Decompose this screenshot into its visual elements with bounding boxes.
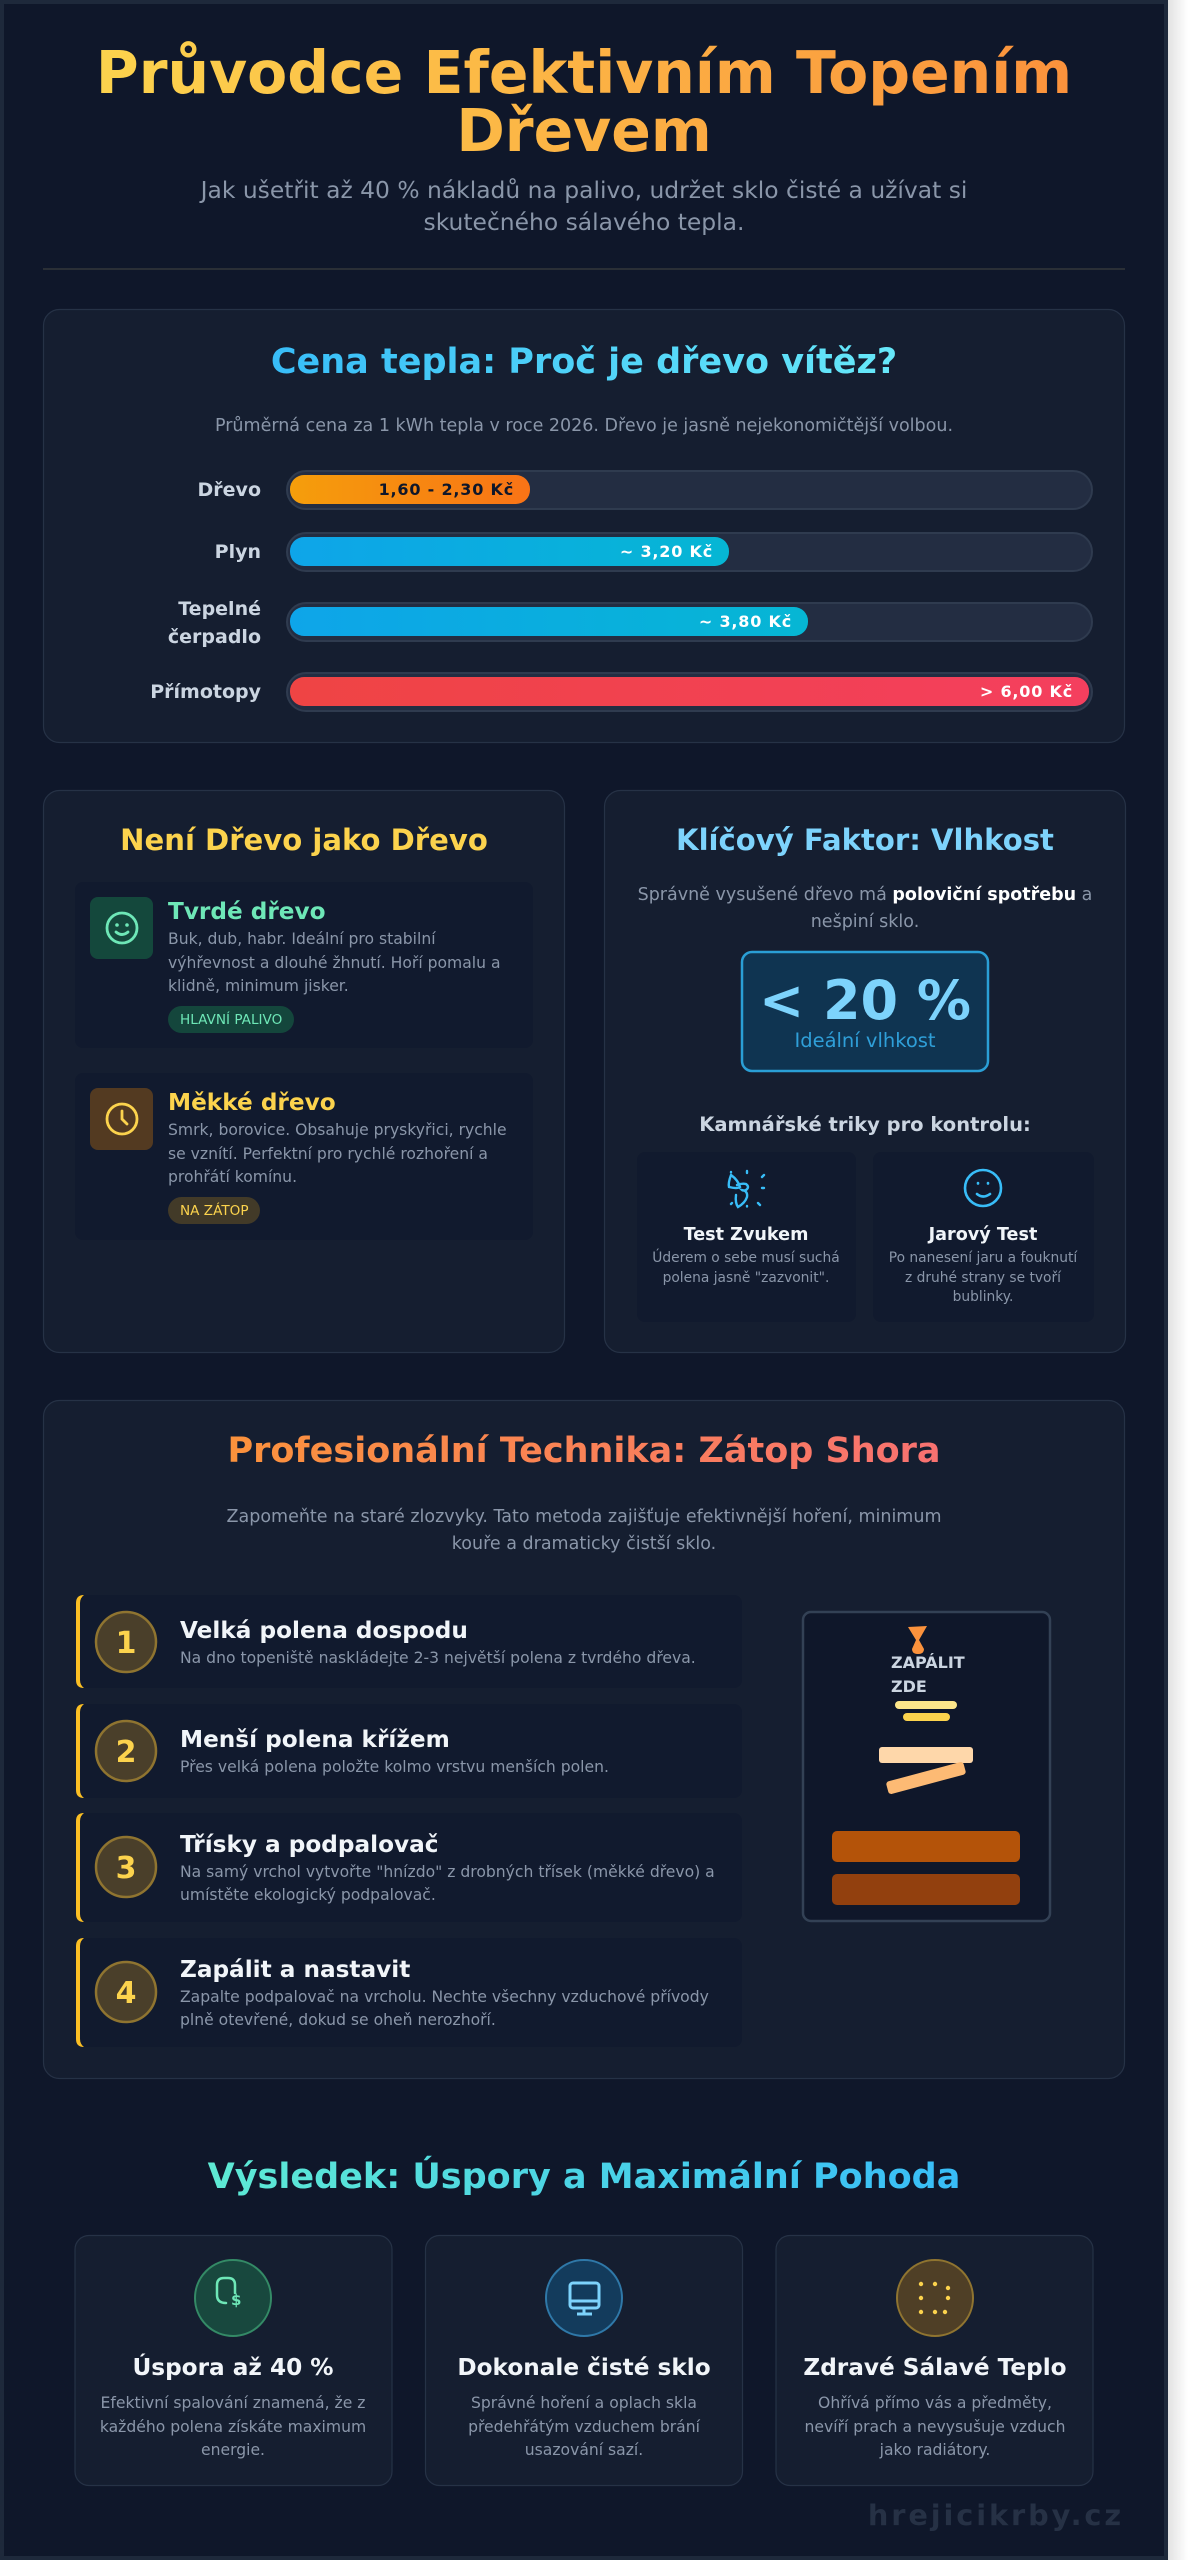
step 3: 3: [116, 1851, 136, 1886]
title: Dřevem: [456, 97, 712, 165]
bar: gas: Plyn: [215, 541, 261, 563]
moisture intro: [638, 885, 1092, 932]
card: hardwood: Buk, dub, habr. Ideální pro stabilní: [168, 930, 436, 948]
card: softwood: prohřátí komínu.: [168, 1168, 297, 1186]
subtitle: skutečného sálavého tepla.: [424, 208, 744, 236]
card: clean glass: Dokonale čisté sklo: [457, 2354, 711, 2381]
bar: heat pump: ~ 3,80 Kč: [699, 612, 792, 631]
heading: result: Výsledek: Úspory a Maximální Pohoda: [208, 2155, 960, 2197]
badge: kindling: [168, 1197, 260, 1224]
step 1: 1: [116, 1626, 136, 1661]
label: light here: ZAPÁLIT: [891, 1653, 965, 1672]
card: savings: Efektivní spalování znamená, že z: [101, 2394, 365, 2412]
icon: radiance: [897, 2260, 973, 2336]
bar: heat pump: [168, 598, 1092, 648]
bar: gas: ~ 3,20 Kč: [620, 542, 713, 561]
card: sound test: [637, 1152, 856, 1322]
badge: main fuel: [168, 1006, 294, 1033]
card: resin test: bublinky.: [953, 1289, 1013, 1305]
card: savings: [75, 2236, 392, 2486]
bar: electric heaters: Přímotopy: [150, 681, 262, 703]
card: radiant heat: [776, 2236, 1093, 2486]
step 3: umístěte ekologický podpalovač.: [180, 1886, 436, 1904]
step 2: Přes velká polena položte kolmo vrstvu menších polen.: [180, 1758, 609, 1776]
kindling: [895, 1701, 957, 1721]
card: savings: každého polena získáte maximum: [100, 2418, 366, 2436]
subheading: tricks: Kamnářské triky pro kontrolu:: [699, 1113, 1031, 1136]
card: radiant heat: Ohřívá přímo vás a předměty,: [818, 2394, 1052, 2412]
icon: smile: [90, 897, 153, 959]
card: softwood: se vznítí. Perfektní pro rychlé rozhoření a: [168, 1145, 488, 1163]
step 4: plně otevřené, dokud se oheň nerozhoří.: [180, 2011, 496, 2029]
icon: sound sparkle: [729, 1171, 764, 1207]
card: softwood: Smrk, borovice. Obsahuje pryskyřici, rychle: [168, 1121, 507, 1139]
badge: main fuel: HLAVNÍ PALIVO: [180, 1010, 282, 1028]
step 1: [76, 1595, 742, 1688]
title: Průvodce Efektivním Topením: [96, 39, 1072, 107]
card: radiant heat: jako radiátory.: [879, 2441, 990, 2459]
card: radiant heat: nevíří prach a nevysušuje vzduch: [804, 2418, 1066, 2436]
panel: price of heat: [44, 310, 1124, 742]
step 2: 2: [116, 1735, 136, 1770]
card: sound test: Úderem o sebe musí suchá: [652, 1248, 840, 1266]
card: savings: energie.: [201, 2441, 265, 2459]
icon: clock: [90, 1088, 153, 1150]
card: resin test: Po nanesení jaru a fouknutí: [889, 1250, 1078, 1266]
step 1: Velká polena dospodu: [180, 1617, 468, 1644]
intro text: price of heat: Průměrná cena za 1 kWh tepla v roce 2026. Dřevo je jasně nejekonomičtější volbou.: [215, 416, 953, 436]
card: resin test: [873, 1152, 1094, 1322]
card: hardwood: [75, 882, 533, 1048]
card: hardwood: výhřevnost a dlouhé žhnutí. Hoří pomalu a: [168, 954, 501, 972]
title: [96, 39, 1072, 165]
card: resin test: Jarový Test: [928, 1225, 1037, 1245]
bar: heat pump: čerpadlo: [168, 626, 261, 648]
card: radiant heat: Zdravé Sálavé Teplo: [803, 2354, 1067, 2381]
callout: under 20 percent: < 20 %: [759, 969, 971, 1032]
step 3: Třísky a podpalovač: [180, 1831, 439, 1858]
bar: wood: 1,60 - 2,30 Kč: [379, 480, 514, 499]
card: hardwood: Tvrdé dřevo: [168, 898, 326, 925]
card: resin test: z druhé strany se tvoří: [905, 1270, 1062, 1286]
bar: wood: Dřevo: [198, 479, 261, 501]
panel: wood types: [44, 790, 564, 1352]
step 2: Menší polena křížem: [180, 1726, 450, 1753]
card: clean glass: usazování sazí.: [525, 2441, 643, 2459]
diagram: log stack: [803, 1612, 1050, 1921]
icon: bubble smile: [965, 1170, 1001, 1206]
card: sound test: Test Zvukem: [684, 1225, 808, 1245]
small logs: [879, 1747, 973, 1795]
bar: heat pump: Tepelné: [178, 598, 261, 620]
technique intro: kouře a dramaticky čistší sklo.: [452, 1534, 716, 1554]
heading: moisture: Klíčový Faktor: Vlhkost: [676, 823, 1054, 857]
badge: kindling: NA ZÁTOP: [180, 1201, 249, 1219]
heading: price of heat: Cena tepla: Proč je dřevo vítěz?: [271, 342, 897, 382]
heading: technique: Profesionální Technika: Zátop Shora: [227, 1431, 941, 1471]
card: clean glass: Správné hoření a oplach skla: [471, 2394, 697, 2412]
label: light here: ZDE: [891, 1677, 927, 1696]
moisture intro: Správně vysušené dřevo má poloviční spotřebu a: [638, 885, 1092, 905]
bar: electric heaters: > 6,00 Kč: [980, 682, 1073, 701]
card: sound test: polena jasně "zazvonit".: [663, 1270, 829, 1286]
card: savings: Úspora až 40 %: [132, 2353, 334, 2381]
icon: screen: [546, 2260, 622, 2336]
big logs: [832, 1831, 1020, 1905]
technique intro: [226, 1507, 942, 1554]
step 3: [76, 1813, 742, 1922]
step 2: [76, 1704, 742, 1798]
callout: under 20 percent: [742, 952, 988, 1071]
panel: top-down burning: [44, 1400, 1124, 2078]
step 3: Na samý vrchol vytvořte "hnízdo" z drobných třísek (měkké dřevo) a: [180, 1863, 715, 1881]
subtitle: Jak ušetřit až 40 % nákladů na palivo, udržet sklo čisté a užívat si: [199, 176, 967, 204]
callout: under 20 percent: Ideální vlhkost: [794, 1029, 936, 1052]
step 4: [76, 1938, 742, 2047]
step 4: 4: [116, 1976, 136, 2011]
technique intro: Zapomeňte na staré zlozvyky. Tato metoda zajišťuje efektivnější hoření, minimum: [226, 1507, 942, 1527]
heading: wood types: Není Dřevo jako Dřevo: [120, 823, 488, 857]
bar: electric heaters: [150, 673, 1092, 711]
bar: gas: [215, 533, 1092, 571]
watermark: hrejicikrby.cz: [868, 2498, 1124, 2532]
icon: flame: [908, 1626, 927, 1654]
bar: wood: [198, 471, 1092, 509]
panel: moisture: [604, 790, 1126, 1352]
card: clean glass: předehřátým vzduchem brání: [468, 2418, 701, 2436]
label: light here: [891, 1653, 965, 1696]
moisture intro: nešpiní sklo.: [811, 912, 919, 932]
icon: money: $: [231, 2291, 241, 2309]
card: hardwood: klidně, minimum jisker.: [168, 977, 349, 995]
subtitle: [199, 176, 967, 236]
step 4: Zapálit a nastavit: [180, 1956, 410, 1983]
step 1: Na dno topeniště naskládejte 2-3 největší polena z tvrdého dřeva.: [180, 1649, 696, 1667]
card: softwood: Měkké dřevo: [168, 1089, 336, 1116]
icon: money: [195, 2260, 271, 2336]
card: clean glass: [426, 2236, 742, 2486]
step 4: Zapalte podpalovač na vrcholu. Nechte všechny vzduchové přívody: [180, 1988, 709, 2006]
card: softwood: [75, 1073, 533, 1240]
